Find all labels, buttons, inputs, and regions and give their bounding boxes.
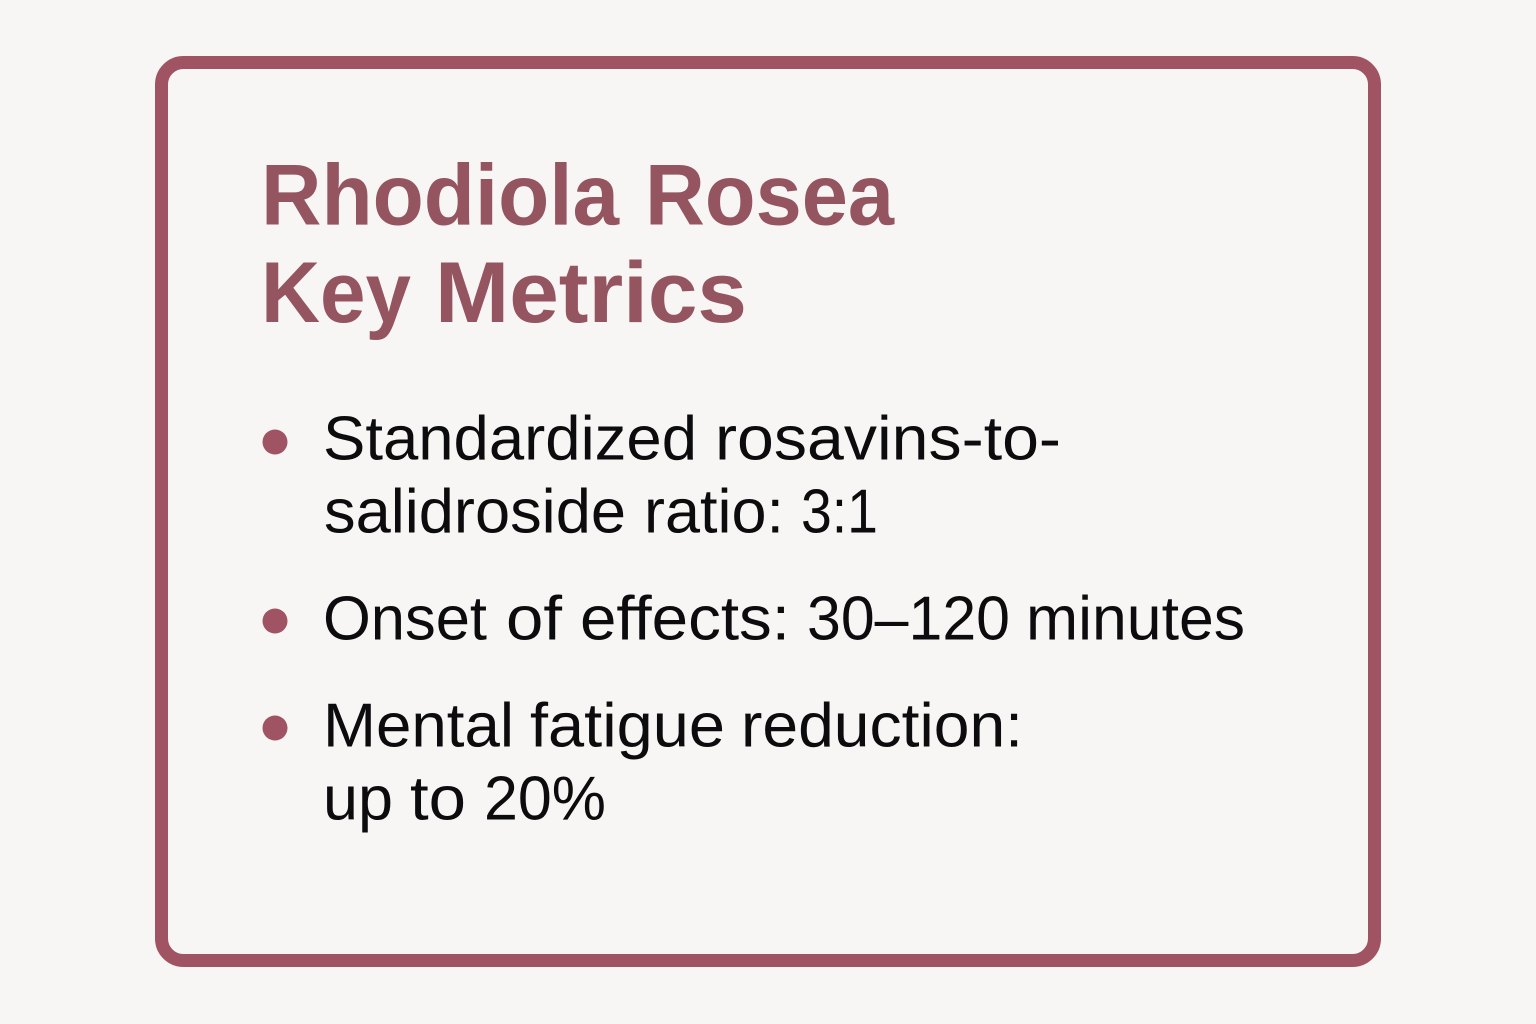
metric: mental fatigue reduction: up bbox=[323, 764, 393, 834]
title: Rhodiola bbox=[261, 148, 620, 244]
metric: onset of effects: effects: bbox=[580, 584, 790, 654]
title: Key bbox=[261, 245, 411, 341]
metric: mental fatigue reduction: Mental bbox=[323, 692, 514, 760]
metric: onset of effects: 30–120 bbox=[807, 584, 1010, 654]
title: Rosea bbox=[645, 148, 895, 244]
metric: standardized ratio: ratio: bbox=[644, 478, 784, 546]
metric: onset of effects: of bbox=[506, 584, 563, 654]
metric: standardized ratio bbox=[262, 404, 1061, 546]
metric: standardized ratio: Standardized bbox=[323, 404, 697, 474]
metric: standardized ratio: rosavins-to- bbox=[715, 404, 1061, 474]
metric: mental fatigue reduction: fatigue bbox=[530, 692, 725, 760]
metric: onset of effects bbox=[262, 584, 1245, 654]
title bbox=[261, 148, 895, 341]
metric: mental fatigue reduction: to bbox=[410, 764, 466, 834]
metric: onset of effects: Onset bbox=[323, 584, 487, 654]
metric: mental fatigue reduction: reduction: bbox=[741, 692, 1023, 760]
title: Metrics bbox=[435, 245, 747, 341]
metric: standardized ratio: salidroside bbox=[324, 478, 626, 546]
metric: standardized ratio: 3:1 bbox=[801, 478, 878, 546]
panel: key metrics card bbox=[162, 62, 1374, 960]
metric: mental fatigue reduction bbox=[262, 692, 1023, 834]
metric: mental fatigue reduction: 20% bbox=[484, 764, 606, 834]
metric: onset of effects: minutes bbox=[1026, 584, 1245, 654]
